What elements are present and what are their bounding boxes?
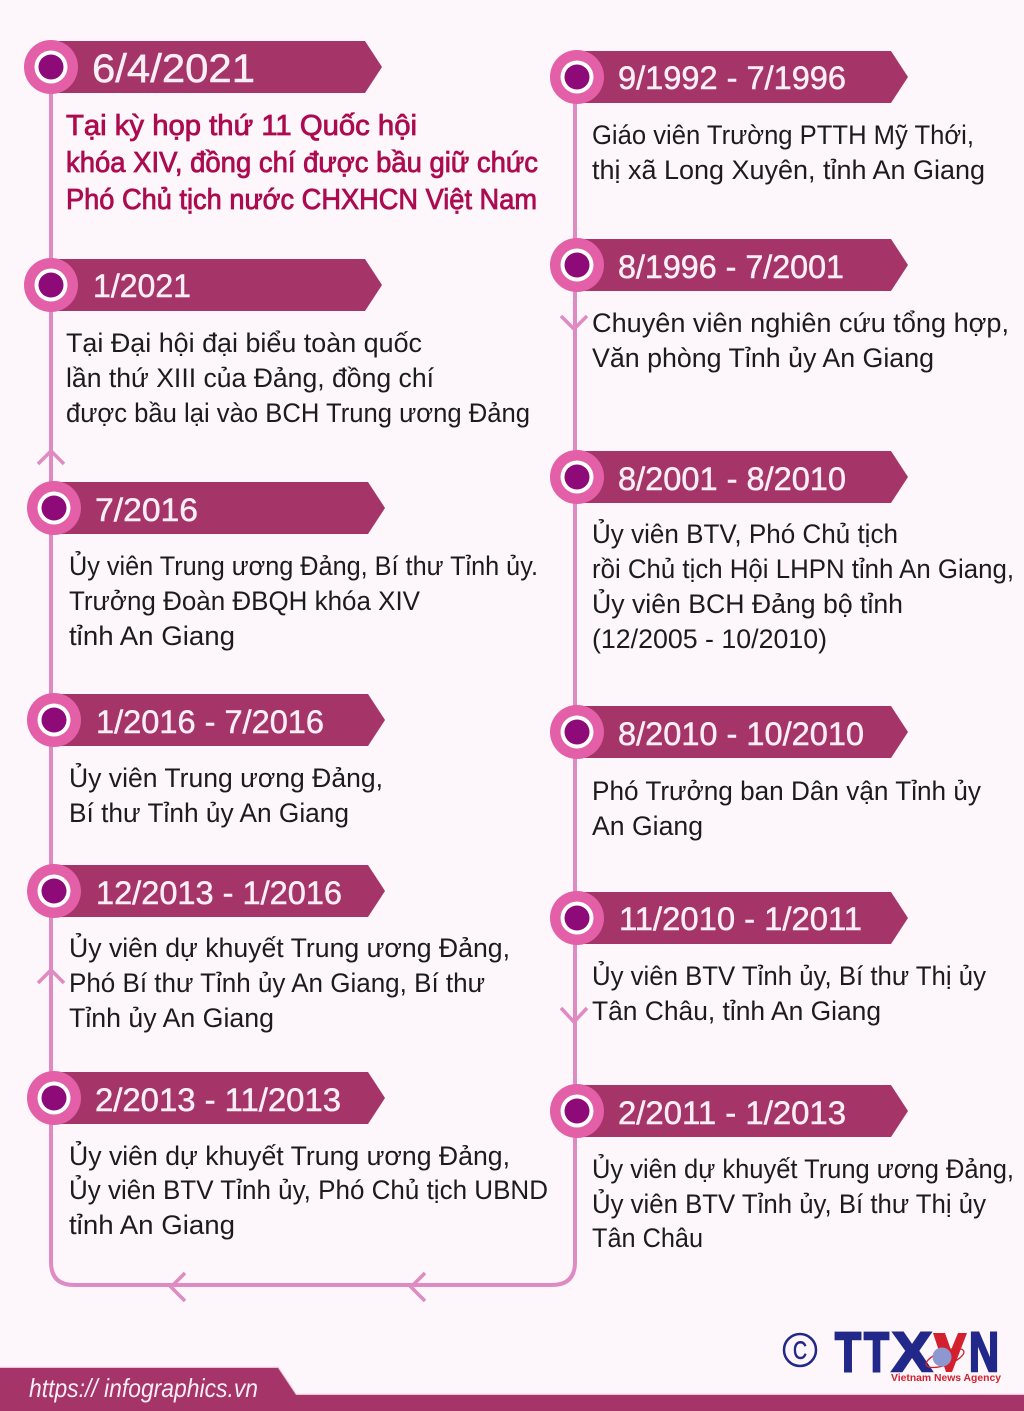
description: Phó Trưởng ban Dân vận Tỉnh ủy [592, 776, 981, 806]
description: Phó Bí thư Tỉnh ủy An Giang, Bí thư [69, 968, 485, 998]
marker [24, 258, 78, 312]
marker [27, 693, 81, 747]
date label: 7/2016 [95, 492, 198, 528]
description: Ủy viên BTV Tỉnh ủy, Bí thư Thị ủy [592, 1187, 986, 1219]
date banner 6/4/2021 [51, 41, 382, 93]
date label: 9/1992 - 7/1996 [618, 60, 846, 96]
entry: 11/2010 - 1/2011 [550, 891, 986, 1026]
description [592, 517, 1014, 654]
description: Tỉnh ủy An Giang [69, 1003, 274, 1033]
arrow: left column upward 1 [38, 451, 64, 464]
description: tỉnh An Giang [69, 1210, 235, 1240]
icon: copyright [784, 1334, 816, 1366]
marker [27, 1071, 81, 1125]
description: Ủy viên BTV Tỉnh ủy, Bí thư Thị ủy [592, 959, 986, 991]
marker [24, 40, 78, 94]
date label: 2/2011 - 1/2013 [618, 1095, 846, 1131]
entry: 2/2013 - 11/2013 [27, 1071, 548, 1240]
description: Ủy viên Trung ương Đảng, Bí thư Tỉnh ủy. [69, 549, 538, 581]
description [592, 1152, 1014, 1253]
description: Văn phòng Tỉnh ủy An Giang [592, 343, 934, 373]
date label: 2/2013 - 11/2013 [95, 1082, 341, 1118]
description [66, 328, 530, 428]
description [69, 1139, 548, 1240]
date banner 12/2013 - 1/2016 [54, 865, 385, 917]
description: Ủy viên BTV, Phó Chủ tịch [592, 517, 898, 549]
description: Ủy viên BCH Đảng bộ tỉnh [592, 587, 903, 619]
description [69, 931, 510, 1033]
arrow: left column upward 2 [38, 970, 64, 983]
marker [550, 50, 604, 104]
date label: 1/2021 [93, 268, 191, 304]
date banner 9/1992 - 7/1996 [577, 51, 908, 103]
highlighted description [66, 110, 538, 216]
description [592, 959, 986, 1026]
date banner 8/2001 - 8/2010 [577, 451, 908, 503]
date banner 2/2011 - 1/2013 [577, 1085, 908, 1137]
highlighted description: khóa XIV, đồng chí được bầu giữ chức [66, 147, 538, 179]
entry: 1/2021 [24, 258, 530, 428]
date banner 7/2016 [54, 482, 385, 534]
description: lần thứ XIII của Đảng, đồng chí [66, 363, 434, 393]
arrow: right column downward 1 [561, 316, 587, 329]
entry: 12/2013 - 1/2016 [27, 864, 510, 1033]
highlighted description: Phó Chủ tịch nước CHXHCN Việt Nam [66, 184, 537, 216]
date banner 8/1996 - 7/2001 [577, 239, 908, 291]
logo: TTXVN: N [969, 1320, 999, 1383]
arrow: right column downward 2 [561, 1008, 587, 1022]
description: Chuyên viên nghiên cứu tổng hợp, [592, 308, 1009, 338]
logo: TTXVN [835, 1320, 1001, 1384]
marker [550, 1084, 604, 1138]
description [69, 549, 538, 651]
footer url: https:// infographics.vn [29, 1373, 258, 1403]
description: (12/2005 - 10/2010) [592, 624, 827, 654]
description: Giáo viên Trường PTTH Mỹ Thới, [592, 120, 974, 150]
description: thị xã Long Xuyên, tỉnh An Giang [592, 155, 985, 185]
marker [550, 238, 604, 292]
logo: TTXVN: Vietnam News Agency [891, 1372, 1001, 1384]
entry: 2/2011 - 1/2013 [550, 1084, 1014, 1253]
marker [550, 450, 604, 504]
description: rồi Chủ tịch Hội LHPN tỉnh An Giang, [592, 554, 1014, 584]
date banner 1/2021 [51, 259, 382, 311]
icon: copyright: C [793, 1337, 807, 1365]
description: tỉnh An Giang [69, 621, 235, 651]
date banner 8/2010 - 10/2010 [577, 706, 908, 758]
description: Ủy viên BTV Tỉnh ủy, Phó Chủ tịch UBND [69, 1173, 548, 1205]
entry: 8/2001 - 8/2010 [550, 450, 1014, 654]
date label: 12/2013 - 1/2016 [96, 875, 342, 911]
marker [550, 891, 604, 945]
date label: 1/2016 - 7/2016 [96, 704, 324, 740]
entry: 8/2010 - 10/2010 [550, 705, 981, 841]
arrow: bottom leftward 2 [411, 1273, 425, 1301]
highlighted description: Tại kỳ họp thứ 11 Quốc hội [66, 110, 417, 142]
arrow: bottom leftward 1 [171, 1273, 185, 1301]
description: Ủy viên dự khuyết Trung ương Đảng, [69, 931, 510, 963]
date banner 1/2016 - 7/2016 [54, 694, 385, 746]
logo: TTXVN: T [835, 1320, 861, 1383]
description: Ủy viên Trung ương Đảng, [69, 761, 383, 793]
entry: 1/2016 - 7/2016 [27, 693, 385, 828]
description: Tân Châu, tỉnh An Giang [592, 996, 881, 1026]
logo: TTXVN: X [892, 1320, 932, 1383]
description [592, 776, 981, 841]
footer band [0, 1368, 1024, 1411]
date label: 8/1996 - 7/2001 [618, 249, 844, 285]
date label: 8/2010 - 10/2010 [618, 716, 864, 752]
description: Tại Đại hội đại biểu toàn quốc [66, 328, 422, 358]
entry: 8/1996 - 7/2001 [550, 238, 1009, 373]
timeline connector line [51, 67, 575, 1285]
description [592, 308, 1009, 373]
description: Tân Châu [592, 1223, 703, 1253]
date label: 11/2010 - 1/2011 [619, 901, 862, 937]
date banner 2/2013 - 11/2013 [54, 1072, 385, 1124]
description: Bí thư Tỉnh ủy An Giang [69, 798, 349, 828]
entry: 9/1992 - 7/1996 [550, 50, 985, 185]
entry: 7/2016 [27, 481, 538, 651]
description: An Giang [592, 811, 703, 841]
description: Trưởng Đoàn ĐBQH khóa XIV [69, 586, 420, 616]
description: được bầu lại vào BCH Trung ương Đảng [66, 398, 530, 428]
description [69, 761, 383, 828]
logo: TTXVN: T [864, 1320, 889, 1383]
entry: 6/4/2021 [24, 40, 538, 216]
marker [27, 481, 81, 535]
description: Ủy viên dự khuyết Trung ương Đảng, [69, 1139, 510, 1171]
date label: 6/4/2021 [92, 47, 255, 91]
marker [550, 705, 604, 759]
description [592, 120, 985, 185]
date banner 11/2010 - 1/2011 [577, 892, 908, 944]
marker [27, 864, 81, 918]
date label: 8/2001 - 8/2010 [618, 461, 846, 497]
